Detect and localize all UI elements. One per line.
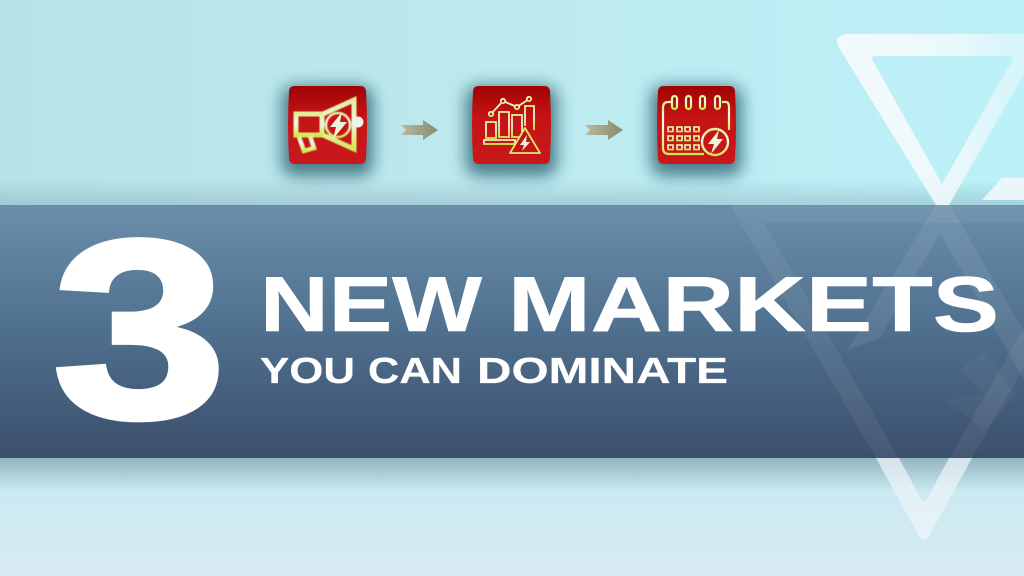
- icon: calendar with lightning bolt: [651, 86, 742, 176]
- arrow: step one to step two: [401, 120, 438, 140]
- big numeral 3: 3: [52, 187, 227, 471]
- subheading: YOU CAN DOMINATE: DOMINATE: [477, 350, 728, 391]
- decorative triangle: top right frame: [837, 34, 1024, 205]
- faint triangles inside the band: [739, 205, 1024, 458]
- subheading: YOU CAN DOMINATE: [260, 350, 728, 391]
- triangle corner fragment: [982, 178, 1024, 200]
- banner band: [0, 205, 1024, 458]
- icon: bar chart with warning triangle: [466, 86, 557, 176]
- icon: megaphone with lightning bolt: [282, 86, 373, 176]
- heading: NEW MARKETS: [260, 260, 999, 348]
- heading: NEW MARKETS: NEW: [260, 260, 482, 348]
- arrow: step two to step three: [585, 120, 623, 140]
- subheading: YOU CAN DOMINATE: CAN: [368, 350, 462, 391]
- subheading: YOU CAN DOMINATE: YOU: [260, 350, 355, 391]
- decorative triangle: lower right segment: [876, 458, 972, 540]
- heading: NEW MARKETS: MARKETS: [508, 260, 999, 348]
